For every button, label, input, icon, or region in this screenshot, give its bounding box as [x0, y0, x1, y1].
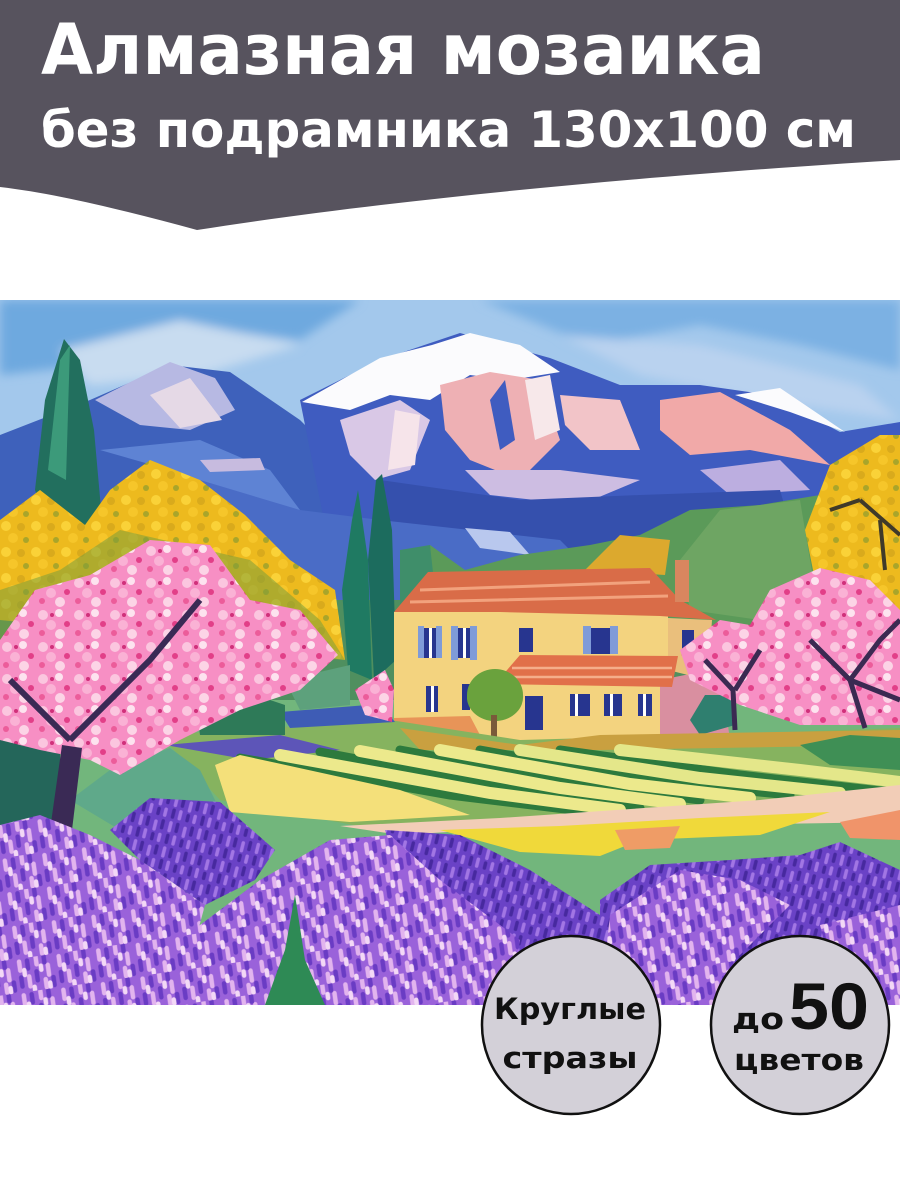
- lower roof: [495, 655, 678, 687]
- badge: round rhinestones: стразы: [502, 1041, 638, 1075]
- middle cypresses: [342, 474, 396, 680]
- yellow flower patch: [215, 755, 470, 822]
- badge: up to 50 colours: до: [732, 1002, 784, 1036]
- mountain: main snowy peak: [300, 333, 900, 548]
- tree: tall left cypress: [35, 339, 100, 525]
- painting: Provence landscape: [0, 300, 900, 1005]
- badge: up to 50 colours: [711, 936, 889, 1114]
- lavender stems: [265, 895, 325, 1005]
- small front tree: [467, 669, 523, 721]
- yellow flowers strip: [440, 812, 830, 856]
- left yellow trees: [0, 460, 345, 660]
- flower garden band: [160, 704, 900, 830]
- badge: up to 50 colours: 50: [789, 969, 869, 1043]
- field rows: [215, 750, 900, 822]
- pink path: [340, 785, 900, 835]
- wall: [394, 612, 668, 740]
- badge: round rhinestones: Круглые: [494, 992, 646, 1026]
- far blue foothills: [200, 480, 600, 600]
- tree: right pink blossom: [680, 568, 900, 730]
- windows: [424, 628, 694, 730]
- badge: round rhinestones: [482, 936, 660, 1114]
- backdrop fill behind midground: [0, 600, 687, 700]
- chimney: [675, 560, 689, 602]
- subtitle: без подрамника 130х100 см: [41, 101, 856, 159]
- mountain: left range: [0, 362, 322, 520]
- header banner: [0, 0, 900, 230]
- dark shrubs under left tree: [0, 665, 350, 830]
- badge: up to 50 colours: цветов: [734, 1043, 864, 1077]
- meadow base: [60, 700, 900, 926]
- green trees behind house: [400, 495, 818, 626]
- right yellow tree branches: [830, 500, 900, 570]
- lavender foreground: [0, 798, 900, 1005]
- dark lavender bushes: [110, 798, 275, 905]
- light lavender bushes: [0, 815, 205, 1005]
- title: Алмазная мозаика: [41, 9, 765, 91]
- sky: [0, 300, 900, 435]
- roof: [394, 568, 716, 620]
- right yellow tree: [805, 435, 900, 610]
- tree: left pink blossom: [0, 540, 394, 830]
- house: [394, 560, 735, 743]
